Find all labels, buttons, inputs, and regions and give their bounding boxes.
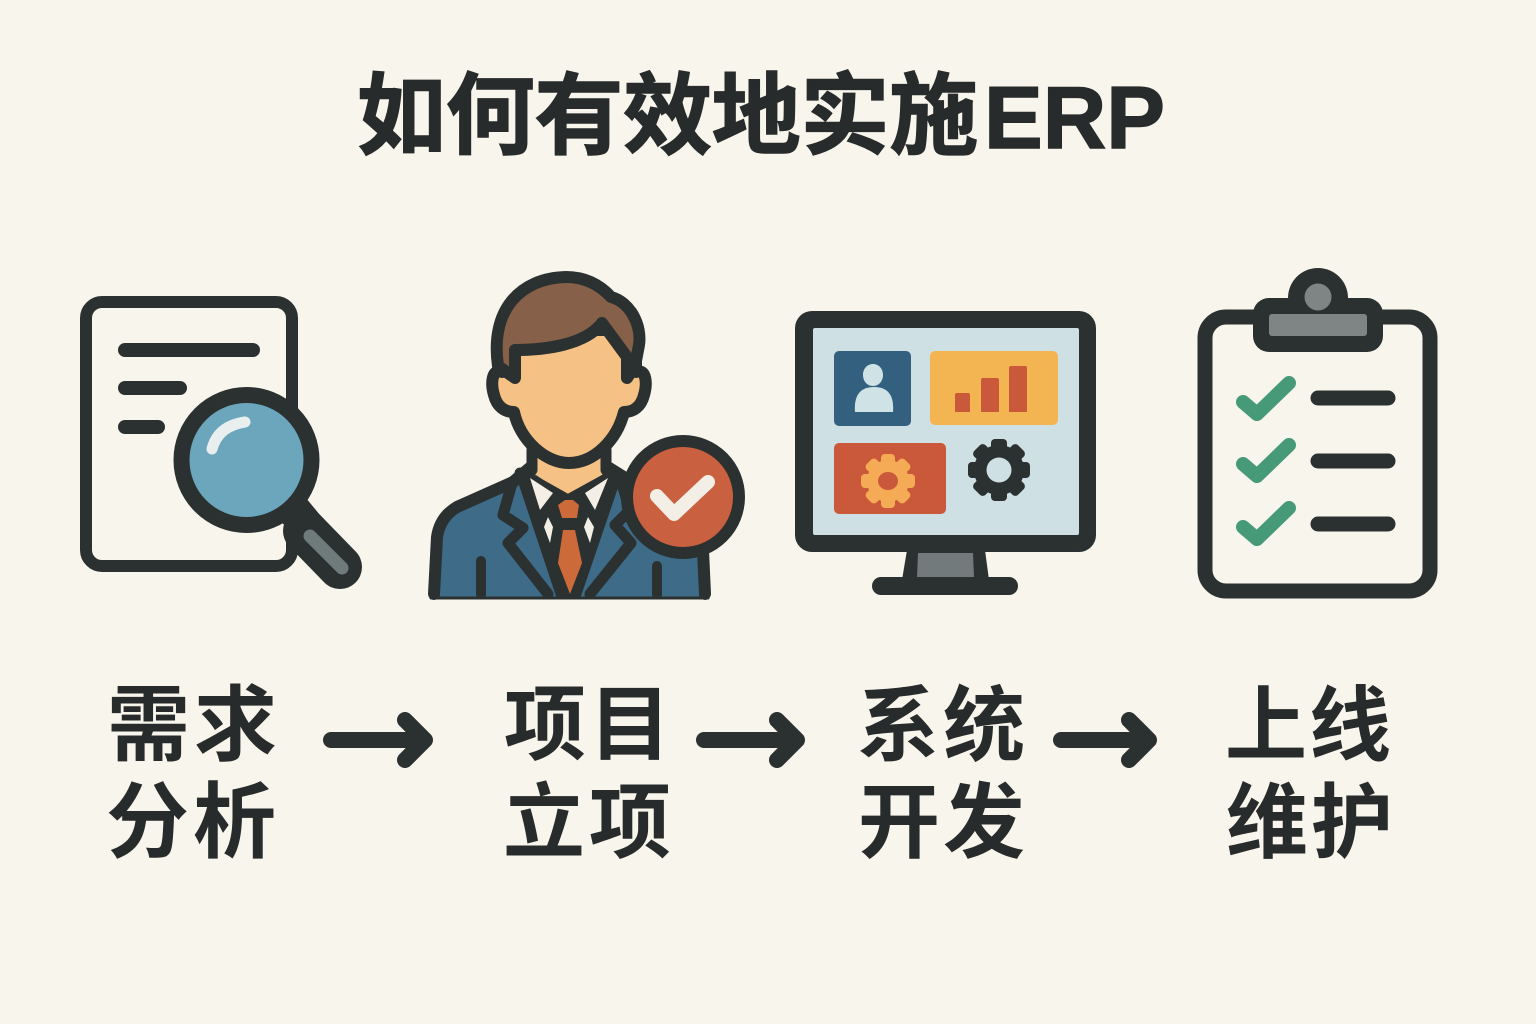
face — [492, 330, 646, 463]
label: 系统开发: 系统 — [857, 681, 1025, 772]
label: 项目立项: 项目 — [504, 680, 671, 771]
stand base — [881, 577, 1009, 595]
label: 上线维护: 维护 — [1226, 778, 1393, 869]
arrow 2 — [704, 720, 797, 760]
neck — [532, 445, 606, 498]
label: 需求分析: 分析 — [106, 776, 276, 869]
screen — [813, 328, 1079, 535]
label: 项目立项 — [503, 680, 671, 869]
orange gear — [861, 454, 915, 508]
clipboard board — [1205, 317, 1430, 591]
label: 需求分析: 需求 — [107, 679, 277, 772]
suit — [430, 464, 707, 599]
magnifier lens — [182, 395, 312, 525]
monitor bezel — [795, 311, 1096, 552]
tie — [558, 500, 582, 594]
neck lines and collar — [520, 450, 617, 500]
arrow 1 — [331, 720, 425, 760]
user tile — [834, 351, 911, 426]
icon: clipboard checklist — [1205, 268, 1430, 591]
user avatar — [855, 364, 893, 412]
label: 上线维护 — [1225, 681, 1393, 869]
document text lines — [125, 350, 253, 427]
sleeve lines — [481, 561, 657, 594]
check marks — [1243, 383, 1289, 539]
chart bars — [955, 366, 1027, 412]
shirt opening — [516, 476, 622, 599]
dark gear — [968, 439, 1030, 501]
title: ERP — [984, 68, 1165, 167]
hair — [497, 277, 639, 378]
check list lines — [1318, 398, 1388, 524]
label: 需求分析 — [106, 679, 277, 869]
magnifier handle — [288, 503, 342, 568]
lens highlight — [212, 422, 245, 449]
stand neck — [917, 553, 974, 577]
suit bottom edge — [431, 596, 708, 600]
icon: computer monitor dashboard — [795, 311, 1096, 586]
white collar — [530, 478, 608, 543]
clip body — [1253, 298, 1383, 352]
clip bump — [1288, 268, 1348, 328]
suit outline — [434, 466, 705, 594]
lapels — [503, 483, 631, 594]
badge check — [657, 482, 708, 514]
icon: document with magnifier — [86, 302, 342, 568]
clip hole — [1304, 284, 1332, 310]
icon: businessman with check badge — [430, 277, 739, 599]
monitor stand — [902, 550, 989, 580]
label: 系统开发: 开发 — [858, 778, 1025, 869]
settings tile — [834, 443, 946, 514]
label: 项目立项: 立项 — [503, 778, 671, 869]
arrow 3 — [1061, 720, 1149, 760]
label: 上线维护: 上线 — [1225, 681, 1391, 772]
title: 如何有效地实施 — [357, 66, 978, 166]
label: 系统开发 — [857, 681, 1025, 869]
badge — [627, 441, 739, 553]
document page — [86, 302, 292, 566]
clip bar — [1269, 314, 1367, 336]
chart tile — [930, 351, 1058, 425]
